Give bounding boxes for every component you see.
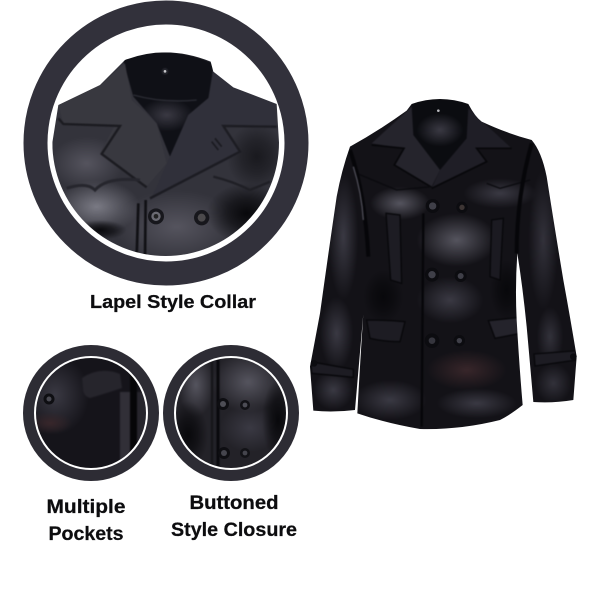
label: lapel style collar: Lapel Style Collar (90, 291, 256, 312)
center placket (422, 213, 423, 427)
cuff straps (311, 362, 353, 377)
right collar and lapel (432, 108, 512, 188)
photo: pocket close-up (36, 358, 146, 468)
inner lining (123, 52, 213, 157)
photo: buttons close-up (176, 358, 286, 468)
button (44, 394, 54, 404)
left collar and lapel (105, 64, 126, 155)
shoulder and sleeve seams (350, 143, 532, 257)
placket (137, 200, 146, 258)
lining (412, 99, 468, 170)
lower pocket flaps (367, 320, 405, 342)
label: multiple pockets: Pockets (48, 524, 124, 545)
panel: buttoned style closure (168, 350, 297, 541)
label: buttoned style closure: Style Closure (171, 520, 297, 541)
placket seams (216, 358, 220, 468)
ring: small dark circle (28, 350, 154, 476)
pocket flap (82, 371, 122, 398)
buttons (220, 398, 229, 410)
photo: collar close-up (52, 52, 279, 256)
panel: multiple pockets (21, 350, 155, 545)
front placket (120, 392, 130, 460)
label: multiple pockets: Multiple (46, 497, 126, 518)
photo: full leather pea coat (310, 99, 577, 430)
yoke seams (67, 179, 140, 190)
leather sheen (374, 190, 426, 218)
panel: lapel style collar (36, 12, 296, 312)
label: buttoned style closure: Buttoned (190, 493, 278, 514)
right collar and lapel (208, 82, 237, 152)
ring: small dark circle (168, 350, 294, 476)
buttons (148, 208, 164, 224)
chest pockets (386, 213, 402, 283)
buttons (311, 199, 577, 367)
yoke seams (391, 182, 520, 191)
ring: large dark circle (36, 12, 296, 274)
left collar and lapel (372, 107, 440, 187)
